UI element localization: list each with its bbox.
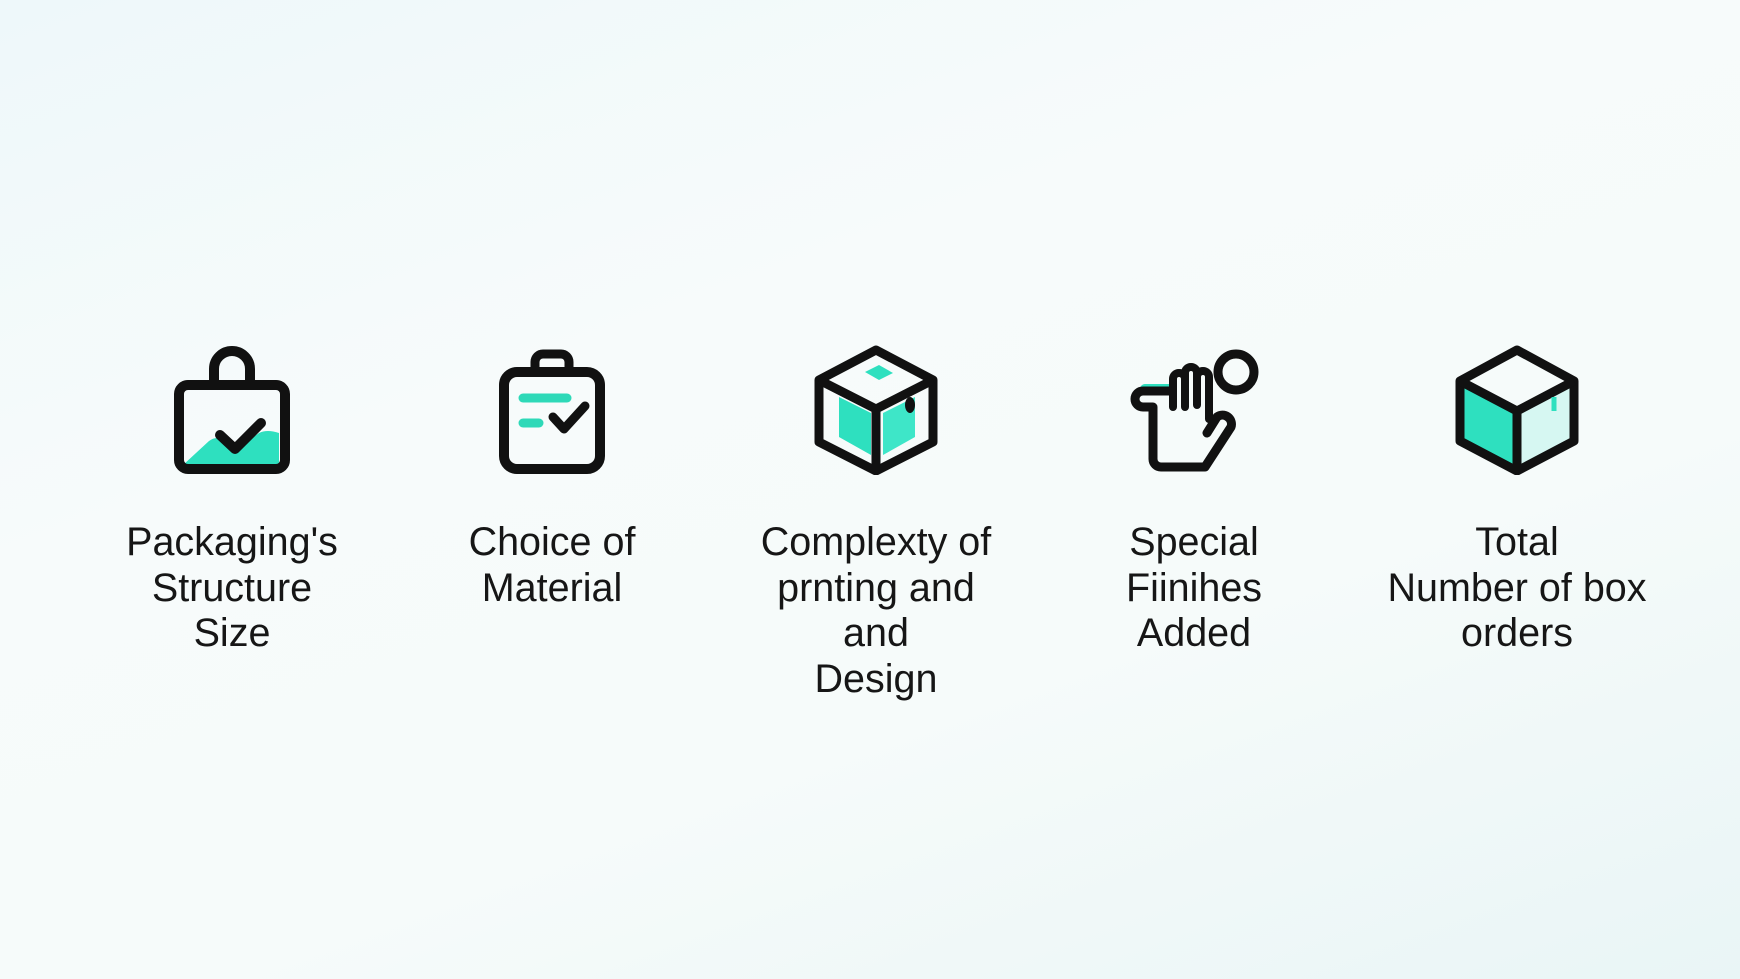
label: Structure (152, 566, 312, 610)
label: Choice of (469, 520, 635, 564)
label: Fiinihes (1126, 566, 1262, 610)
label (469, 520, 636, 610)
label: Total (1475, 520, 1559, 564)
label: Special (1129, 520, 1259, 564)
label: Complexty of (761, 520, 991, 564)
label: orders (1461, 611, 1573, 655)
label (126, 520, 338, 655)
item: Packaging's Structure Size (126, 346, 338, 655)
label: Packaging's (126, 520, 338, 564)
item: Total Number of box orders (1387, 346, 1647, 655)
label (761, 520, 992, 700)
icon: cube (1456, 346, 1578, 475)
label: Number of box (1387, 566, 1647, 610)
label: Material (482, 566, 622, 610)
icon: shopping bag with check (174, 346, 290, 474)
label: prnting and (777, 566, 975, 610)
label: Size (194, 611, 270, 655)
label (1387, 520, 1647, 655)
label (1126, 520, 1262, 655)
icon: hand (1130, 350, 1258, 472)
item: Choice of Material (469, 350, 636, 610)
label: and (843, 611, 909, 655)
item: Complexity of printing and Design (761, 346, 992, 700)
label: Design (815, 656, 937, 700)
item: Special Finishes Added (1126, 350, 1262, 655)
icon: clipboard (499, 350, 605, 474)
label: Added (1137, 611, 1251, 655)
icon: box (814, 346, 938, 475)
